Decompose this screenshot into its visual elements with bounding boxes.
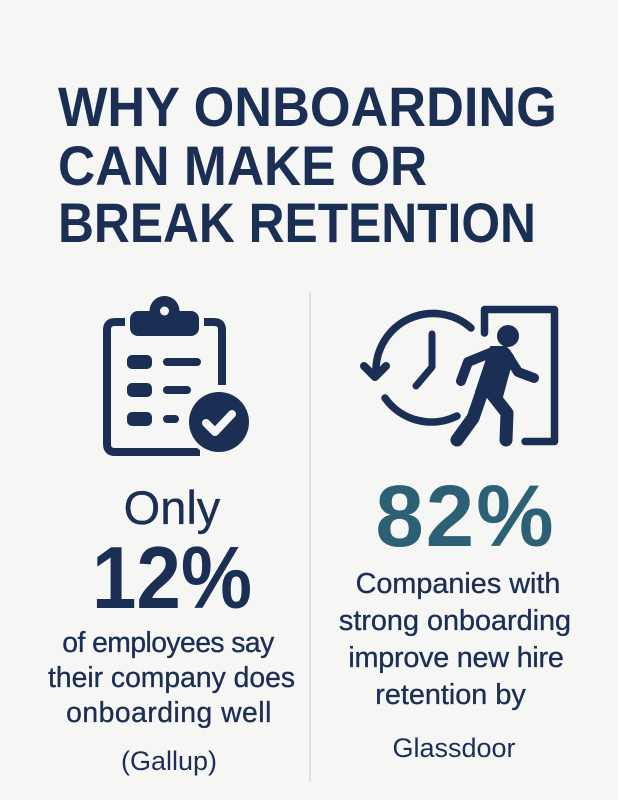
left description bbox=[48, 626, 295, 728]
right description: Companies with bbox=[356, 568, 560, 600]
right source: Glassdoor bbox=[392, 733, 516, 763]
title: CAN MAKE OR bbox=[58, 134, 427, 197]
left description: their company does bbox=[48, 661, 295, 693]
right stat: 82%: 82% bbox=[375, 468, 556, 565]
title: BREAK RETENTION bbox=[58, 191, 536, 254]
title bbox=[58, 75, 557, 254]
left stat: Only: Only bbox=[124, 481, 220, 534]
left source: (Gallup) bbox=[121, 746, 217, 776]
icon: clock and person leaving through door bbox=[360, 306, 558, 446]
right description: improve new hire bbox=[348, 642, 564, 674]
icon: clipboard with check mark bbox=[103, 296, 249, 456]
left stat: 12%: 12% bbox=[92, 528, 252, 626]
left description: of employees say bbox=[62, 626, 274, 658]
right description: retention by bbox=[375, 679, 526, 711]
right description: strong onboarding bbox=[339, 605, 571, 637]
title: WHY ONBOARDING bbox=[58, 75, 557, 138]
right description bbox=[339, 568, 571, 711]
left description: onboarding well bbox=[66, 696, 272, 728]
